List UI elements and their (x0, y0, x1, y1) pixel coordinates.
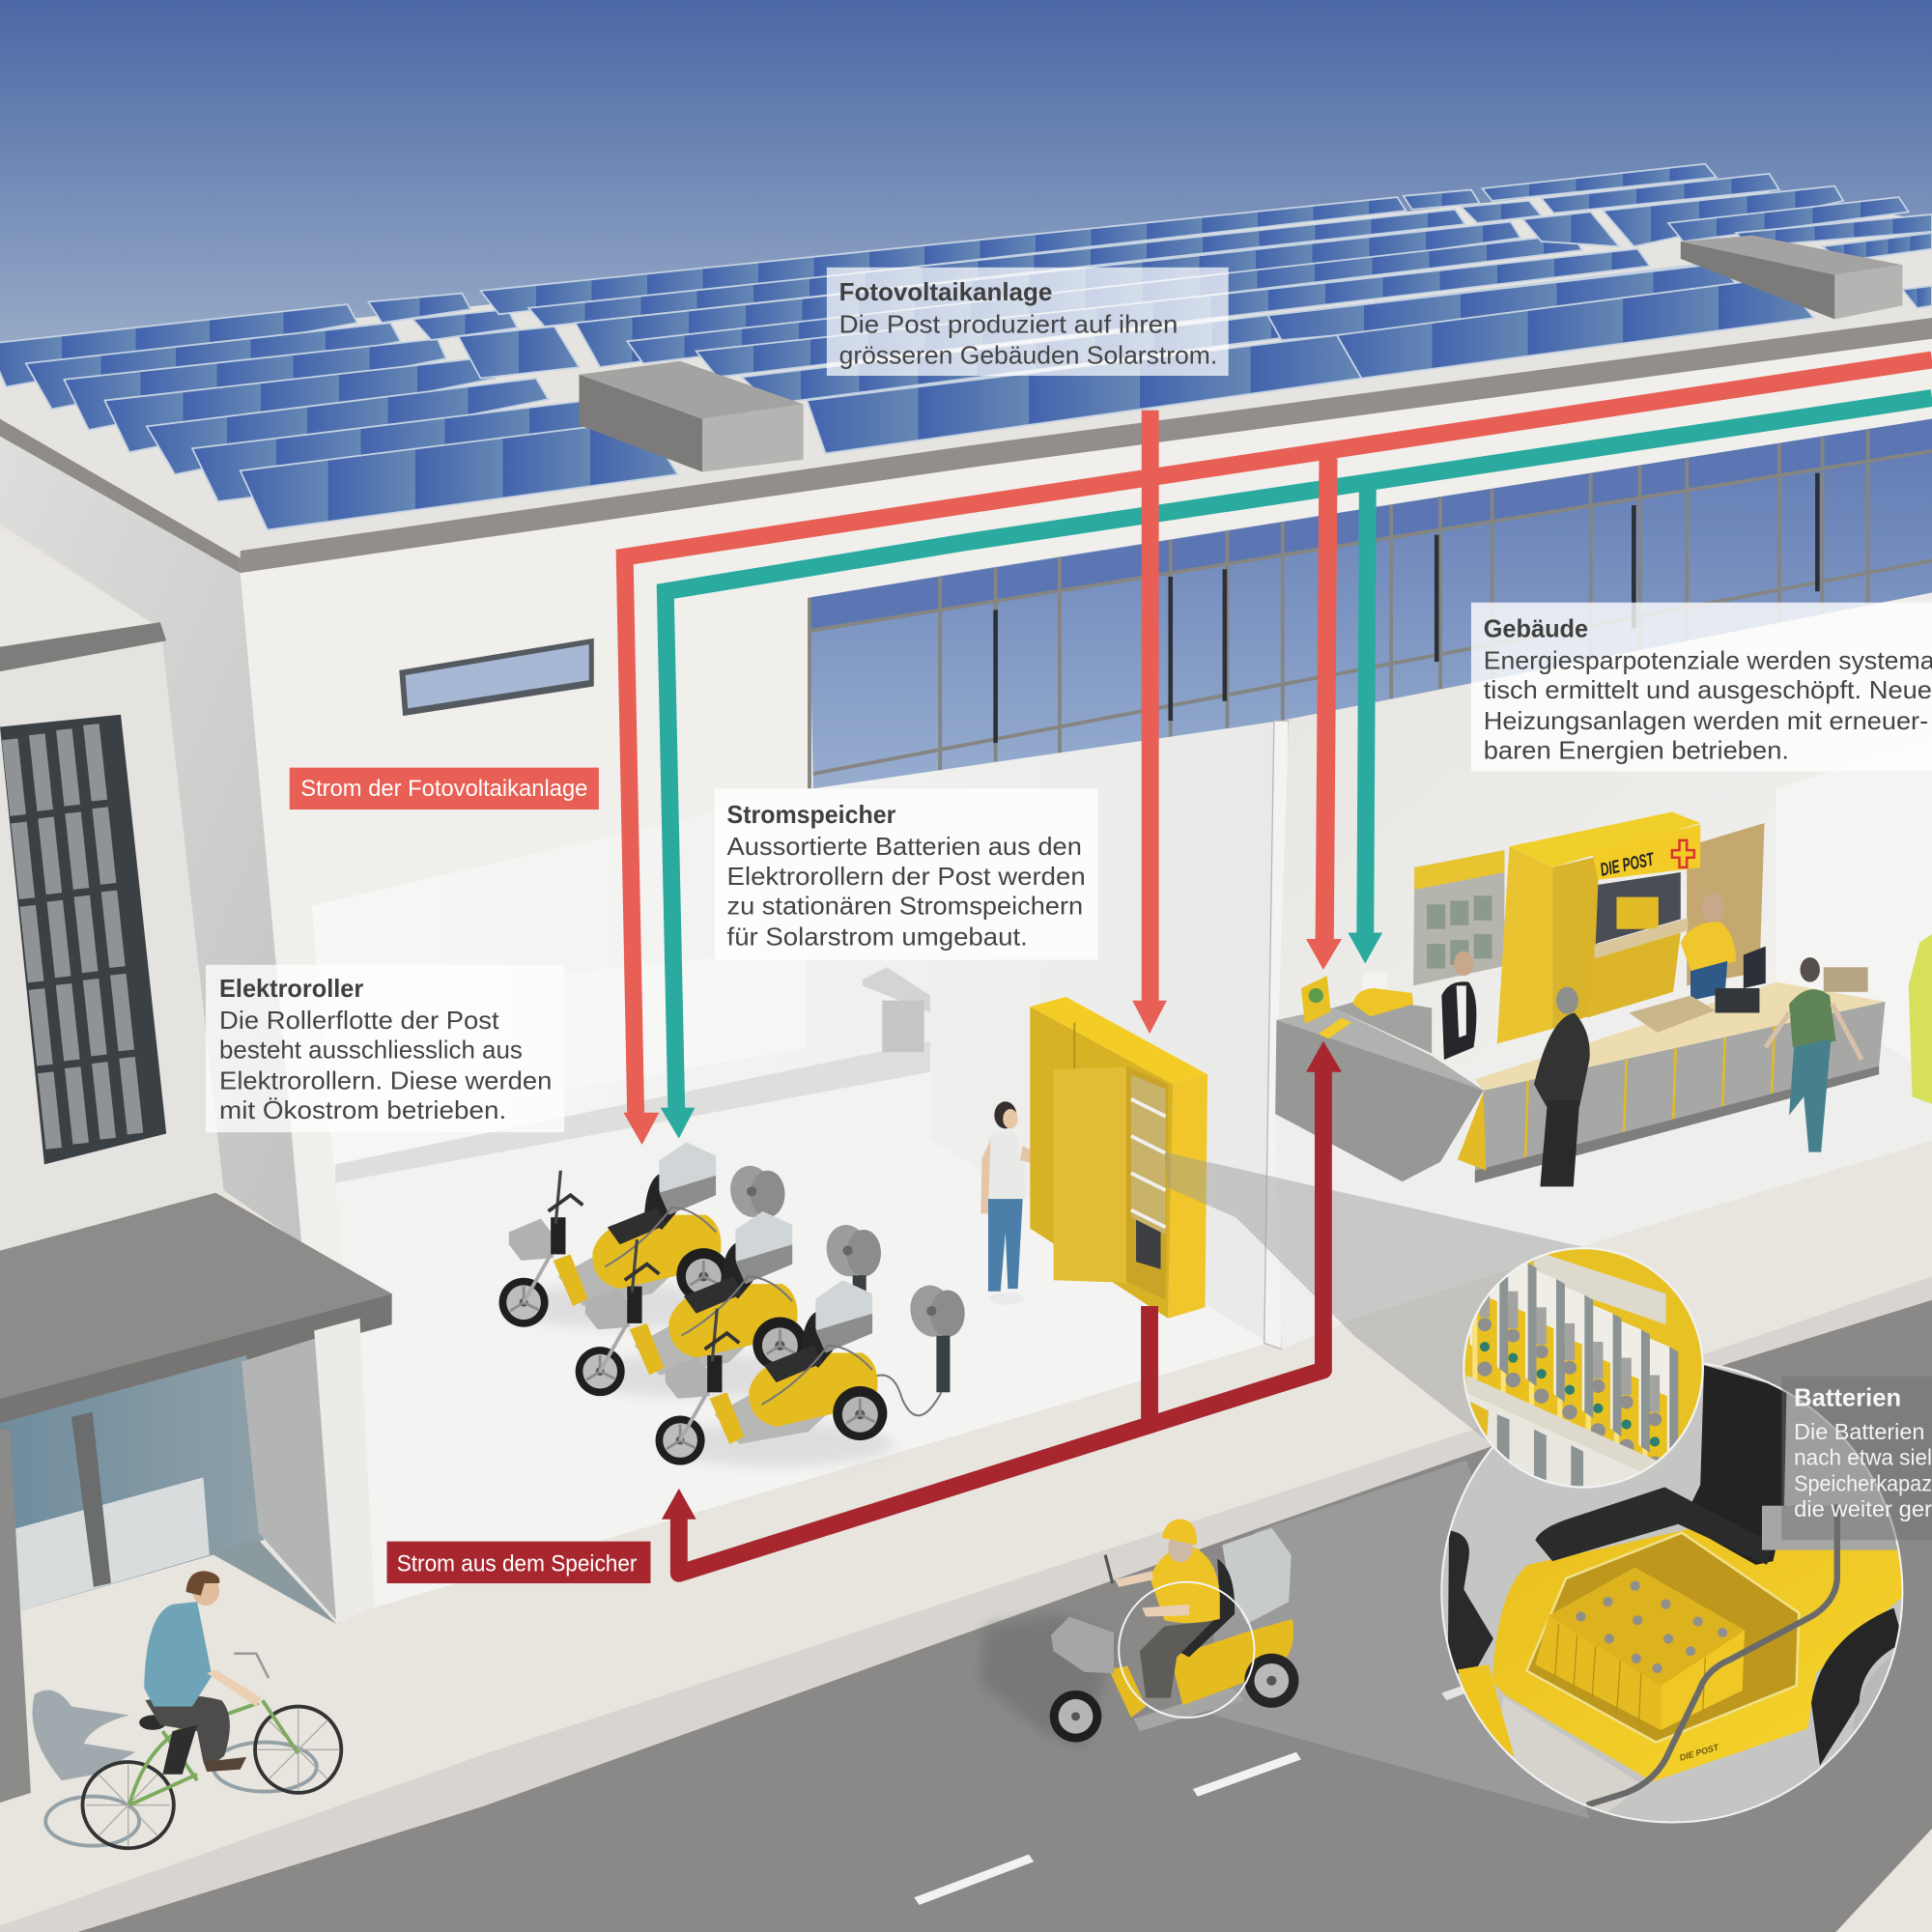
bike wheels (82, 1762, 174, 1848)
storage room: ledge (335, 949, 930, 1282)
cyclist arm (207, 1669, 261, 1707)
corner pillar (210, 1319, 375, 1624)
shadow of rider (980, 1614, 1115, 1747)
battery compartment (1526, 1533, 1799, 1743)
yellow tower (1497, 812, 1700, 1043)
side wall of building (0, 431, 339, 1269)
post logo on body: DIE POST (1679, 1742, 1721, 1763)
battery block (1535, 1567, 1745, 1730)
text block: Batterien: die weiter ger (1794, 1496, 1932, 1521)
post office: side wall (1776, 739, 1932, 1072)
grey desk (1275, 998, 1484, 1181)
battery rack (1470, 1264, 1679, 1462)
text block: Stromspeicher: zu stationären Stromspeichern (727, 891, 1083, 920)
yellow monitor (1301, 976, 1351, 1038)
road markings (914, 1685, 1466, 1905)
curb (0, 1276, 1932, 1932)
text block: Stromspeicher (715, 788, 1097, 960)
charger 3 (906, 1281, 965, 1392)
rooftop unit: right (1681, 236, 1902, 319)
far sidewalk corner (1836, 1836, 1932, 1932)
delivery rider on scooter (1050, 1520, 1298, 1743)
DIE POST sign: DIE POST (1599, 849, 1658, 881)
storage room: back wall (312, 721, 1282, 1343)
road (77, 1300, 1932, 1932)
text block: Fotovoltaikanlage: grösseren Gebäuden Solarstrom. (839, 340, 1217, 369)
yellow printer (1353, 972, 1413, 1016)
rear wheel and fender (1811, 1608, 1904, 1768)
arrow: photovoltaic power to storage (red) (1132, 411, 1167, 1034)
rooftop unit: left (579, 361, 804, 472)
poster board (1413, 850, 1504, 985)
label: Strom aus dem Speicher (387, 1542, 650, 1583)
flat roof surface (0, 179, 1932, 558)
charger 2 (822, 1221, 881, 1332)
post office: floor (1275, 985, 1932, 1350)
open cabinet shelves (1126, 1065, 1168, 1300)
roof fascia (0, 318, 1932, 573)
scooter 3 (656, 1280, 894, 1466)
solar panels: centre group (480, 197, 1814, 453)
staff member in yellow (1681, 894, 1736, 1001)
counter top (1475, 982, 1886, 1091)
bike frame (129, 1700, 298, 1805)
seat and backrest (1535, 1365, 1904, 1565)
ribbon window with mullions (810, 419, 1932, 788)
text block: Elektroroller: Elektroroller (219, 976, 363, 1003)
storage room: floor (345, 1140, 1269, 1608)
text block: Gebäude: Heizungsanlagen werden mit erneuer- (1484, 706, 1928, 735)
text block: Batterien (1781, 1377, 1932, 1540)
cable (1587, 1504, 1837, 1805)
left annex: wall (0, 622, 224, 1288)
customer at right edge (1909, 934, 1932, 1104)
DIE POST sign (1592, 824, 1700, 881)
label: Strom der Fotovoltaikanlage (290, 768, 599, 810)
text block: Stromspeicher: Stromspeicher (727, 802, 895, 829)
text block: Batterien: nach etwa siel (1794, 1445, 1932, 1470)
clerk in black (1441, 952, 1476, 1060)
scooter body (1492, 1526, 1904, 1781)
canopy (0, 1193, 392, 1430)
cabinet door (1054, 1067, 1126, 1283)
charger 1 (725, 1162, 784, 1273)
scooter magnifier ring (1119, 1582, 1254, 1718)
text block: Stromspeicher: Elektrorollern der Post werden (727, 862, 1086, 891)
cyclist head (186, 1571, 219, 1605)
text block: Gebäude: baren Energien betrieben. (1484, 736, 1789, 765)
text block: Gebäude: tisch ermittelt und ausgeschöpft. Neue (1484, 675, 1932, 704)
cyclist shadow (33, 1690, 135, 1780)
service window (1587, 872, 1688, 1018)
front wall (241, 339, 1932, 1624)
large detail circle: battery under seat (1441, 1361, 1904, 1824)
door (1687, 823, 1765, 985)
cyclist legs (146, 1695, 230, 1766)
customer in green (1766, 957, 1861, 1152)
text block: Elektroroller: besteht ausschliesslich aus (219, 1036, 523, 1065)
solar panels: left group (0, 294, 678, 529)
post office: back wall (1275, 593, 1932, 1115)
small window (399, 639, 594, 716)
battery storage cabinet (1030, 997, 1208, 1319)
post counter (1275, 812, 1932, 1186)
text block: Batterien: Batterien (1794, 1384, 1901, 1411)
text block: Gebäude: Gebäude (1484, 615, 1588, 642)
customer in suit (1534, 987, 1590, 1186)
text block: Fotovoltaikanlage (827, 268, 1229, 376)
cyclist torso (144, 1602, 212, 1707)
text block: Gebäude (1471, 603, 1932, 771)
callout beam: cabinet to battery detail (1164, 1152, 1583, 1441)
rider leg (1448, 1530, 1493, 1676)
text block: Elektroroller (206, 965, 564, 1132)
storefront glazing (0, 1355, 264, 1803)
text block: Stromspeicher: Aussortierte Batterien aus den (727, 832, 1082, 861)
scooter 2 (576, 1211, 813, 1397)
text block: Fotovoltaikanlage: Fotovoltaikanlage (839, 279, 1052, 306)
text block: Elektroroller: mit Ökostrom betrieben. (219, 1095, 506, 1124)
partition wall (1264, 721, 1289, 1350)
arrow: green power to scooters and post office (teal) (661, 398, 1932, 1139)
storage room: wall vent (863, 967, 930, 1052)
arrow: power from storage (dark red) (662, 1041, 1342, 1574)
text block: Elektroroller: Die Rollerflotte der Post (219, 1006, 499, 1035)
arrow: photovoltaic power to post office (red) (1306, 458, 1342, 970)
sky background (0, 0, 1932, 407)
scooter 1 (499, 1142, 737, 1328)
arrow: photovoltaic power to scooters (red) (623, 359, 1932, 1145)
scooter group: three charging scooters with chargers (499, 1142, 965, 1466)
floor (1501, 1696, 1639, 1812)
front fender (1458, 1664, 1515, 1757)
small detail circle: stored batteries (1463, 1239, 1703, 1497)
label: Strom aus dem Speicher: Strom aus dem Speicher (397, 1550, 638, 1576)
callout beam: rider to scooter detail (1213, 1460, 1589, 1819)
text block: Gebäude: Energiesparpotenziale werden systema (1484, 646, 1932, 675)
text block: Fotovoltaikanlage: Die Post produziert auf ihren (839, 309, 1178, 338)
parcel and cash desk (1629, 947, 1868, 1033)
counter front panels (1458, 1002, 1886, 1182)
saddle (139, 1716, 166, 1730)
text block: Stromspeicher: für Solarstrom umgebaut. (727, 922, 1028, 951)
solar panels: right group (1404, 164, 1932, 308)
cyclist (33, 1571, 341, 1848)
label: Strom der Fotovoltaikanlage: Strom der Fotovoltaikanlage (300, 776, 587, 801)
text block: Batterien: Die Batterien (1794, 1419, 1924, 1444)
left annex: lower roof (0, 529, 166, 671)
charging cable (872, 1376, 941, 1415)
decorative facade panel (0, 715, 166, 1164)
text block: Elektroroller: Elektrorollern. Diese werden (219, 1066, 552, 1095)
sidewalk and ground (0, 1141, 1932, 1932)
person at storage cabinet (980, 1101, 1055, 1305)
